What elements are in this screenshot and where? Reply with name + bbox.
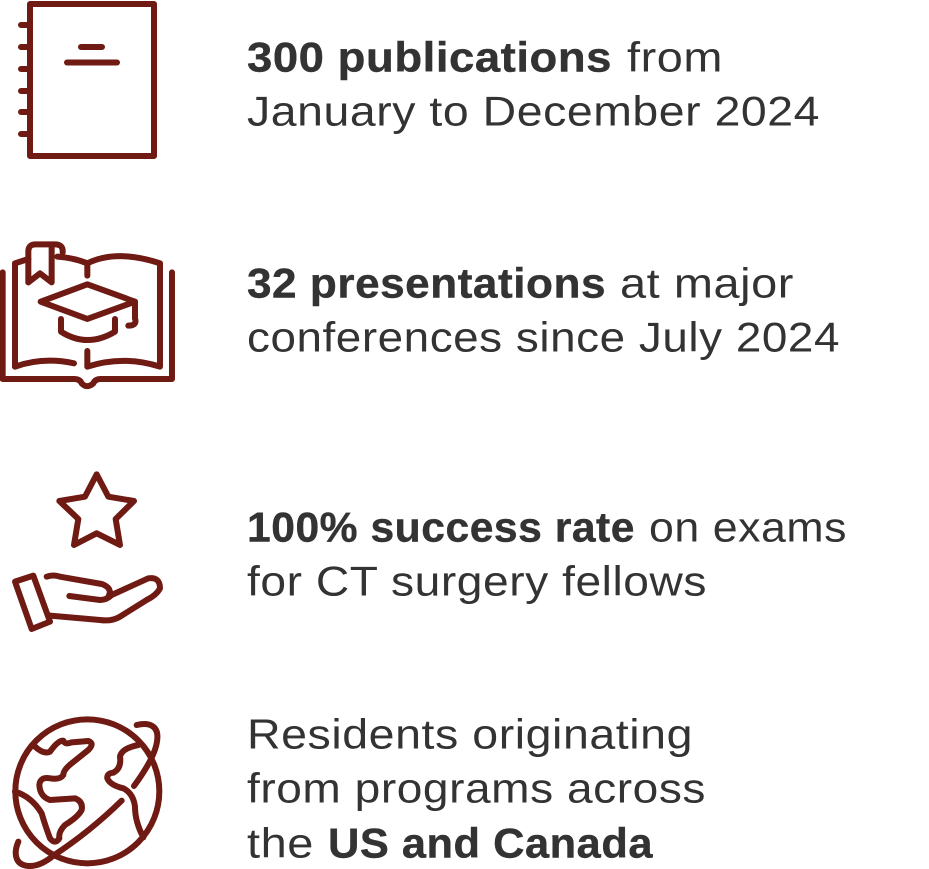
text: residents: Residents originating (247, 710, 693, 758)
text: publications: from (627, 34, 723, 80)
text: success rate: on exams (649, 504, 847, 550)
text: publications: January to December 2024 (247, 88, 820, 134)
icon: notebook (21, 4, 154, 156)
text: publications (247, 34, 820, 134)
text: residents (247, 710, 706, 866)
text: presentations: at major (620, 260, 794, 306)
text: presentations: conferences since July 2024 (247, 314, 840, 360)
icon: open book with graduation cap (3, 244, 172, 386)
text: presentations (247, 260, 840, 360)
text: residents: US and Canada (328, 820, 653, 866)
text: success rate: 100% success rate (247, 504, 635, 550)
text: publications: 300 publications (247, 34, 612, 80)
text: success rate: for CT surgery fellows (247, 558, 707, 604)
text: residents: from programs across (247, 764, 706, 812)
icon: globe (15, 719, 159, 866)
text: success rate (247, 504, 847, 604)
text: residents: the (247, 820, 314, 866)
text: presentations: 32 presentations (247, 260, 606, 306)
icon: hand holding star (15, 474, 160, 629)
